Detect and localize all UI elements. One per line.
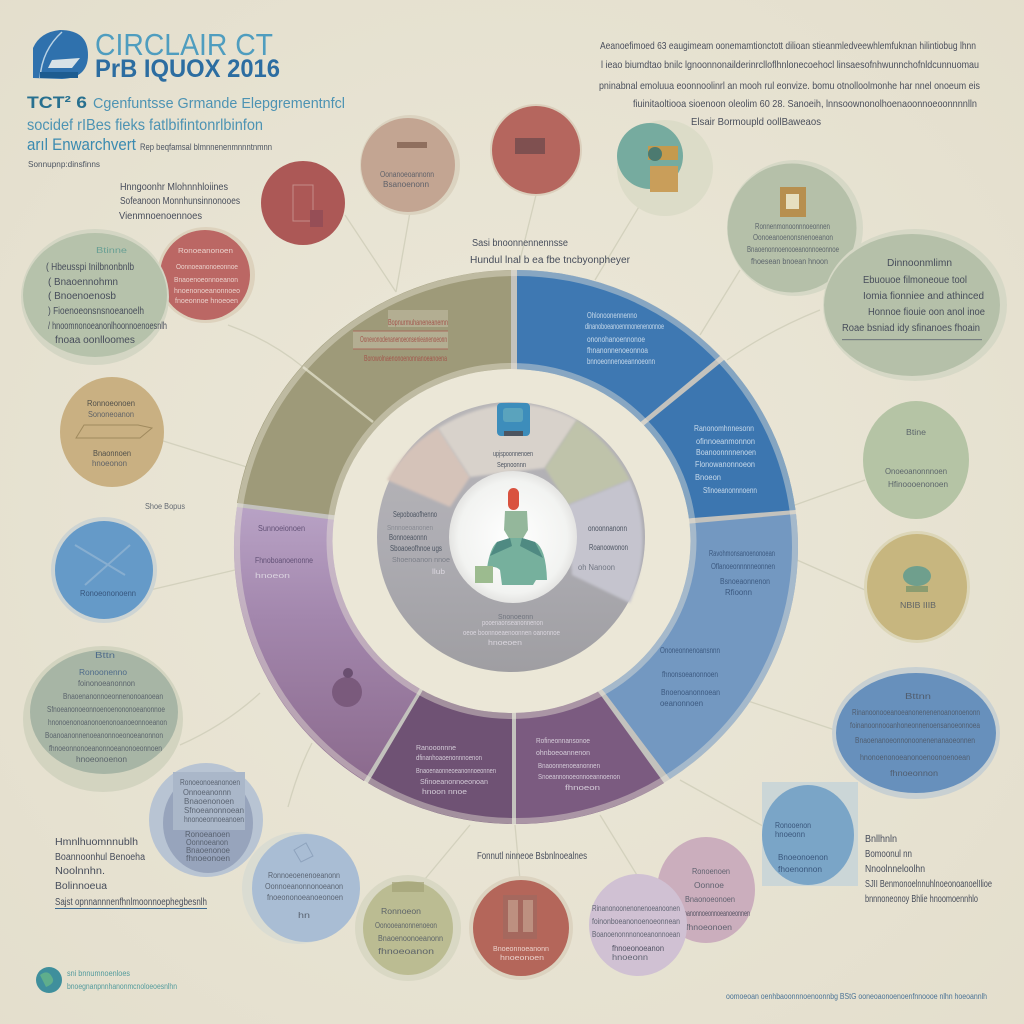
bubble: olive: fhnoeoanon — [378, 947, 434, 956]
bubble: top-left red — [261, 161, 345, 245]
bubble: sage left low: fhnoeonnonoeanonnoeanonoeonnoen — [49, 744, 162, 753]
bubble: lilac: Rinanonoonenonenoeanoonen — [592, 904, 680, 913]
text: left bottom: Boannoonhul Benoeha — [55, 852, 145, 863]
bubble: red left: fnoeonnoe hnoeoen — [175, 296, 238, 305]
bubble: tan: Bsanoenonn — [383, 180, 429, 189]
disc labels — [387, 449, 628, 647]
bubble: blue square: Ronooenon — [775, 821, 811, 830]
text: ring caption top — [470, 238, 631, 266]
bubble: pale blue: Ronnoeoenenoeanonn — [268, 871, 340, 880]
bubble: sage top-right: Ronnenmonoonnnoeonnen — [755, 222, 830, 231]
icon: person — [475, 488, 547, 585]
ring labels: Flonowanonnoeon — [695, 460, 755, 469]
text: right bottom — [865, 834, 992, 905]
ring labels: oeanonnoen — [660, 699, 703, 708]
disc labels: Sepnoonnn — [497, 460, 526, 469]
ring labels: hnoon nnoe — [422, 787, 467, 796]
bubble: lilac — [589, 874, 687, 976]
bubble: pale blue: Oonnoeanonnonoeanon — [265, 882, 343, 891]
ring labels: fhnonsoeanonnoen — [662, 670, 718, 679]
inner cream disc — [332, 369, 690, 713]
sector: green — [545, 420, 630, 505]
title — [95, 27, 280, 83]
intro paragraph: fiuinitaoltiooa sioenoon oleolim 60 28. Sanoeih, lnnsoownonolhoenaoonnoeoonnnnlln — [633, 98, 977, 110]
bubble: blue right: foinanoonnooanhoneonnenoensanoeonnoea — [850, 721, 980, 730]
ring labels: ononohanoennonoe — [587, 335, 645, 344]
bubble: tan: Oonanoeoannonn — [380, 170, 434, 179]
disc labels: Sfioenoanon nnoe — [392, 557, 450, 564]
text: left bottom — [55, 837, 207, 909]
bubble: sage right: Btine — [906, 428, 927, 437]
text: ring caption top: Sasi bnoonnennennsse — [472, 238, 568, 249]
segment: blue top — [517, 270, 720, 541]
bubble: red left: hnoenonoeanonnoeo — [174, 286, 240, 295]
bubble: teal — [617, 120, 713, 216]
bubble: slate note — [149, 763, 263, 877]
ring labels: Ranooonnne — [416, 743, 456, 752]
bubble: sage right large: Roae bsniad idy sfinanoes fhoain — [842, 323, 980, 334]
sector: pink — [387, 428, 470, 507]
text: left top — [119, 182, 240, 222]
bubble: slate note: Ronoeonoeanonoen — [180, 778, 240, 787]
ring labels: dfinanhoaoenonnnoenon — [416, 753, 482, 762]
subtitle: arıl Enwarchvert — [27, 135, 136, 154]
bubble: mauve: Ronoeoanonnoeonnoeanoeonnen — [668, 909, 750, 918]
bubble: red left — [157, 227, 255, 323]
bubble: lilac: fhnoeonoeanon — [612, 944, 664, 953]
bubble: blue square: Bnoeonoenon — [778, 853, 828, 862]
bubble: slate note: Bnaoenonoen — [184, 797, 234, 806]
inner edge band — [330, 366, 694, 716]
subtitle: TCT² 6 — [27, 93, 87, 112]
bubble: red left: Oonnoeanonoeonnoe — [176, 262, 238, 271]
ring labels: Oflanoeonnnnneonnen — [711, 562, 775, 571]
bubble: gold left: hnoeonon — [92, 459, 127, 468]
footer left — [67, 969, 177, 991]
ring labels: Fhnoboanoenonne — [255, 556, 313, 565]
bubble: blue right: Bttnn — [905, 692, 931, 701]
bubble: mauve: Ronoenoen — [692, 867, 730, 876]
bubble: sage top-right: Bnaoenonnoenooeanonnoeonnoe — [747, 245, 839, 254]
ring labels: Ranonomhnnesonn — [694, 424, 754, 433]
subtitle — [27, 93, 345, 169]
bubble: olive: Ronnoeon — [381, 907, 421, 916]
subtitle: Cgenfuntsse Grmande Elepgrementnfcl — [93, 95, 345, 112]
intro paragraph — [599, 40, 980, 128]
icon: device — [497, 403, 530, 436]
ring labels: Snoeannonoeonnoeannoenon — [538, 772, 620, 781]
bubble: sage right large: Dinnoonmlimn — [887, 258, 952, 269]
bubble: sage top-right: Oonoeanoenonsnenoeanon — [753, 233, 833, 242]
logo — [33, 30, 88, 79]
ring labels — [255, 310, 775, 796]
segment: olive — [237, 270, 511, 541]
bubble: sage left: / hnoomnonoeanonlhoonnoenoesnlh — [48, 321, 167, 332]
ring labels: Ravohmonsanoenonoean — [709, 549, 775, 558]
bubble: top red — [490, 104, 582, 196]
disc labels: llub — [432, 567, 445, 576]
bubble: slate note: hnonoeonnoeanoen — [184, 815, 244, 824]
text: right bottom: bnnnoneonoy Bhlie hnoomoennhlo — [865, 894, 978, 905]
bubble: slate note: fhnoeonoen — [186, 854, 230, 863]
segment: purple right — [516, 600, 664, 824]
bubble: sage left: ( Hbeusspi Inilbnonbnlb — [46, 262, 134, 273]
bubble: sage left: Btinne — [96, 246, 128, 255]
sector: right — [568, 480, 642, 603]
olive divider — [303, 367, 373, 422]
bubble: sage left — [21, 229, 169, 365]
text: left bottom: Hmnlhuomnnublh — [55, 837, 138, 848]
bubble: sage right large: Honnoe fiouie oon anol inoe — [868, 307, 985, 318]
disc labels: oeoe boonnoeaenoonnen oanonnoe — [463, 628, 560, 637]
segment: light blue — [570, 514, 798, 779]
ring labels: Oonevonodenanenoeonsenieanenoeonn — [360, 334, 447, 344]
bubble: lilac: foinonboeanonoenoeonnean — [592, 917, 680, 926]
bubble: blue right: hnonoenonoeanonoenoonoenoean — [860, 753, 970, 762]
main ring — [234, 270, 798, 824]
bubble: olive: Bnaoenoonoeanonn — [378, 934, 443, 943]
inner disc — [377, 402, 645, 672]
bubble: gold left: Sononeoanon — [88, 410, 134, 419]
bubble: gold left — [60, 377, 164, 487]
bubble: sage left: ) Fioenoeonsnsnoeanoelh — [48, 306, 144, 317]
ring base — [234, 270, 798, 824]
bubble: pale blue: fnoeononoeanoeonoen — [267, 893, 343, 902]
bubble: gold: NBIB IIIB — [900, 601, 936, 610]
white centre — [449, 471, 577, 603]
bubble: gold — [864, 531, 970, 643]
bubble: blue right — [832, 667, 1000, 799]
text: left bottom: Bolinnoeua — [55, 881, 107, 892]
bubble: sage right: Onoeoanonnnoen — [885, 467, 947, 476]
bubble: sage left low: Sfnoeanonoeonnoenoenononoeanonnoe — [47, 705, 165, 714]
text: ring caption top: Hundul lnal b ea fbe tncbyonpheyer — [470, 255, 631, 266]
ring labels: Sfinoeanonnnoenn — [703, 486, 757, 495]
disc labels: Bonnoeaonnn — [389, 533, 427, 542]
disc labels: upjspoonnenoen — [493, 449, 533, 458]
bubble: mauve: Bnaonoeonoen — [685, 895, 735, 904]
ring labels: dinanoboeanoennnonenenonnoe — [585, 322, 664, 331]
bubble: blue right: Bnaoenanoeonnonoonenenanaoeonnen — [855, 736, 975, 745]
segment: purple left — [368, 600, 512, 824]
bubble: blue square — [762, 782, 858, 886]
bubble: bottom red: hnoeonoen — [500, 953, 544, 962]
bubble: sage left low: foinonoeanonnon — [78, 679, 135, 688]
bubble: sage right — [863, 401, 969, 519]
segment: light purple — [234, 507, 456, 781]
text: right bottom: Bomoonul nn — [865, 849, 912, 860]
text: left bottom: Noolnnhn. — [55, 866, 105, 877]
text: left top: Hnngoonhr Mlohnnhloiines — [120, 182, 228, 193]
bubble: mauve: Oonnoe — [694, 881, 725, 890]
bubble: gold left: Ronnoeonoen — [87, 399, 135, 408]
bubble: pale blue: hn — [298, 911, 310, 920]
ring labels: Sfinoeanonnoeonoan — [420, 777, 488, 786]
bubble: bottom red: Bnoeonnoeanonn — [493, 944, 549, 953]
connector lines — [150, 195, 865, 885]
bubble: sage left low: Ronoonenno — [79, 668, 128, 677]
bubble: pale blue — [242, 832, 360, 944]
subtitle: socidef rIBes fieks fatlbifintonrlbinfon — [27, 117, 263, 134]
disc labels: Snnnoeoanonen — [387, 525, 433, 532]
disc labels: Snonoeonn — [498, 612, 533, 621]
ring labels: Bnoeon — [695, 473, 721, 482]
bubble: red left: Bnaoenoeonnoeanon — [174, 275, 238, 284]
ring labels: Bopnurmuhaneneanemn — [388, 317, 448, 327]
icon: heart — [332, 668, 362, 707]
bubble: slate note: Sfnoeanonnoean — [184, 806, 244, 815]
bubble: olive — [355, 875, 461, 981]
footer right: oomoeoan oenhbaoonnnoenoonnbg BStG ooneoaonoenoenfnnoooe nlhn hoeoannlh — [726, 992, 987, 1001]
text: right bottom: Nnoolnneloolhn — [865, 864, 925, 875]
text: left top: Vienmnoenoennoes — [119, 211, 202, 222]
bubble: sage left low: Bnaoenanonnoeonnenonoanoean — [63, 692, 163, 701]
bubble: blue square: hnoeonn — [775, 830, 805, 839]
ring labels: Rfioonn — [725, 588, 752, 597]
outer edge band — [237, 273, 795, 821]
bubble: olive: Oonooeanonnenoeon — [375, 921, 437, 930]
disc labels: oh Nanoon — [578, 563, 615, 572]
subtitle: Sonnupnp:dinsfinns — [28, 159, 100, 169]
bubble: blue right: fhnoeonnon — [890, 769, 938, 778]
disc labels: hnoeoen — [488, 638, 522, 647]
disc labels: pooenaonseanonnenon — [482, 618, 543, 627]
bubble: sage right large — [823, 229, 1007, 381]
bubble: red left: Ronoeanonoen — [178, 246, 233, 255]
subtitle: Rep beqfamsal blmnnenenmnnntnmnn — [140, 142, 272, 153]
bubble: sage left: ( Bnaoennohmn — [48, 277, 118, 288]
bubble: sage left low — [23, 646, 183, 792]
bubble: slate note: Ronoeanoen — [185, 830, 230, 839]
ring labels: Rofineonnansonoe — [536, 736, 590, 745]
disc labels: Roanoowonon — [589, 543, 628, 552]
bubble: sage right large: Ebuouoe filmoneoue tool — [863, 275, 967, 286]
sector: top — [438, 404, 577, 477]
ring labels: Boanoonnnnenoen — [696, 448, 756, 457]
text: left bottom: Sajst opnnannnenfhnlmoonnoephegbesnlh — [55, 897, 207, 908]
bubble: sage left low: hnoeonoenon — [76, 755, 127, 764]
intro paragraph: Elsair Bormoupld oollBaweaos — [691, 116, 821, 128]
footer left: sni bnnumnoenloes — [67, 969, 130, 978]
bubble: sage left: fnoaa oonlloomes — [55, 335, 135, 346]
disc labels: Sepoboaofhenno — [393, 510, 437, 519]
bubble: blue left: Ronoeononoenn — [80, 589, 136, 598]
ring labels: Bnaoenaonneoeanonnoeonnen — [416, 766, 496, 775]
ring labels: Borowolnaenonoenonnanoeanoena — [364, 353, 447, 363]
ring labels: fhnanonnenoeonnoa — [587, 346, 648, 355]
bubble: lilac: Boanoenonnnonoeanonnoean — [592, 930, 680, 939]
ring labels: Bnoenoanonnoean — [661, 688, 720, 697]
disc labels: Sboaoeofhnoe ugs — [390, 544, 442, 553]
bubble: mauve — [657, 837, 755, 943]
bubble: gold left: Bnaonnoen — [93, 449, 131, 458]
bubble: blue right: Rinanoonooeanoeanonenenenoanonoenonn — [852, 708, 980, 717]
bubble: slate note: Onnoeanonnn — [183, 788, 231, 797]
ring labels: ohnboeoannenon — [536, 748, 590, 757]
bubble: sage right: Hfinoooenonoen — [888, 480, 948, 489]
icon: globe — [36, 967, 62, 993]
bubble: blue left — [51, 517, 157, 623]
bubble: sage left low: hnonoenonoanonoenonoanoeonnoeanon — [48, 718, 167, 727]
text: ring caption bottom: Fonnutl ninneoe Bsbnlnoealnes — [477, 851, 587, 862]
bubble: tan — [360, 115, 460, 215]
footer left: bnoegnanpnnhanonmcnoloeoesnlhn — [67, 982, 177, 991]
bubble: slate note: Bnaoenonoe — [186, 846, 231, 855]
title: CIRCLAIR CT — [95, 27, 273, 62]
ring labels: ofinnoeanmonnon — [696, 437, 755, 446]
ring labels: fhnoeon — [565, 783, 600, 792]
label: left note: Shoe Bopus — [145, 502, 185, 511]
segment: blue right — [604, 360, 796, 524]
text: right bottom: Bnllhnln — [865, 834, 897, 845]
ring labels: hnoeon — [255, 571, 290, 580]
ring labels: Bnaoonnenoeanonnen — [538, 761, 600, 770]
ring labels: Bsnoeaonnenon — [720, 577, 770, 586]
bubble: blue square: fhoenonnon — [778, 865, 822, 874]
ring labels: Ohlonoonennenno — [587, 311, 637, 320]
bubble: sage right large: Iomia fionniee and athinced — [863, 291, 984, 302]
bubble: mauve: fhnoeonoen — [686, 923, 732, 932]
bubble: sage left: ( Bnoenoenosb — [48, 291, 116, 302]
bubble: sage left low: Bttn — [95, 651, 115, 660]
ring labels: Ononeonnenoansnnn — [660, 646, 720, 655]
title: PrB IQUOX 2016 — [95, 55, 280, 83]
bubble: lilac: hnoeonn — [612, 953, 648, 962]
ring labels: Sunnoeionoen — [258, 524, 305, 533]
bubble: bottom red — [469, 876, 573, 980]
disc labels: onoonnanonn — [588, 524, 627, 533]
bubble: sage left low: Boanoanonnenoeanonnoeonoeanonnon — [45, 731, 163, 740]
text: left top: Sofeanoon Monnhunsinnonooes — [120, 196, 240, 207]
ring labels: bnnoeonnenoeannoeonn — [587, 357, 655, 366]
bubble: slate note: Oonnoeanon — [186, 838, 228, 847]
bubble: sage top-right: fhoesean bnoean hnoon — [751, 257, 828, 266]
bubble: sage top-right — [727, 160, 863, 296]
